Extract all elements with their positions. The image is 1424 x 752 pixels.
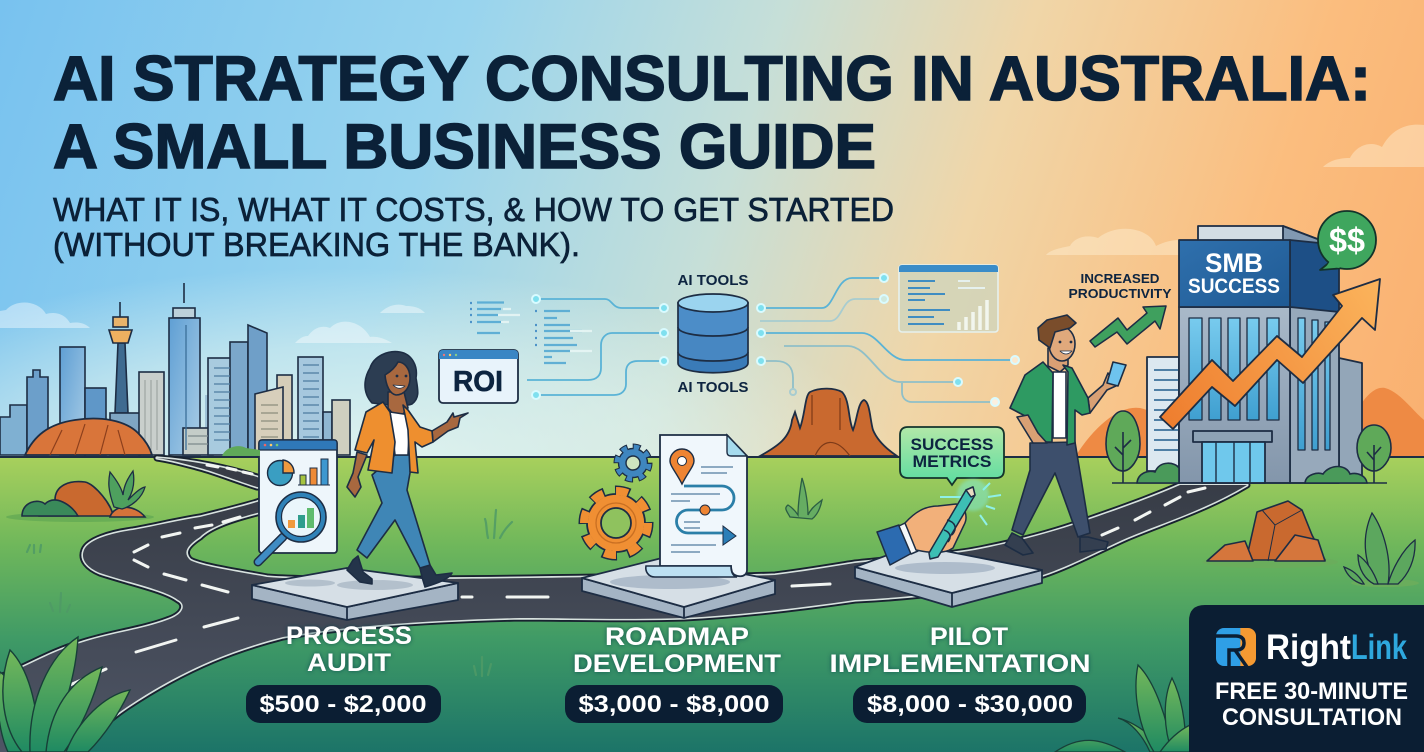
- subtitle: WHAT IT IS, WHAT IT COSTS, & HOW TO GET STARTED: [53, 191, 894, 228]
- woman walking: [347, 352, 468, 587]
- pants: [357, 455, 430, 568]
- report with magnifier: [258, 440, 337, 562]
- dark grass tuft centre: [786, 478, 822, 519]
- shirt left panel: [1010, 362, 1053, 442]
- neck: [1048, 348, 1068, 372]
- call to action panel: FREE 30-MINUTE: [1215, 678, 1408, 705]
- network lines: [527, 278, 1015, 402]
- label: process audit: PROCESS: [286, 622, 412, 650]
- code lists: [470, 302, 592, 363]
- title: A SMALL BUSINESS GUIDE: [53, 112, 876, 182]
- pie chart: [268, 460, 294, 486]
- call to action panel: Link: [1351, 628, 1407, 667]
- orange gear: [584, 491, 648, 555]
- hand holding pen: [877, 479, 1001, 565]
- city skyline: [0, 283, 350, 455]
- neck: [388, 392, 408, 420]
- winding road: [0, 458, 1247, 752]
- grass right: [1344, 513, 1419, 587]
- white top: [390, 412, 410, 455]
- shoes: [347, 556, 372, 584]
- network nodes: [532, 274, 1019, 406]
- rock right: [1202, 501, 1338, 568]
- rock and bush left: [6, 471, 154, 522]
- sign text: SMB: [1205, 248, 1263, 278]
- subtitle: (WITHOUT BREAKING THE BANK).: [53, 226, 580, 263]
- large grass bottom-left: [0, 637, 130, 752]
- gear icons: [584, 447, 649, 555]
- platform: process audit: [252, 568, 458, 620]
- label: pilot implementation: PILOT: [930, 623, 1008, 651]
- man walking with phone: [1005, 315, 1126, 555]
- platform: roadmap development: [582, 558, 775, 618]
- label: roadmap development: ROADMAP: [605, 623, 749, 651]
- phone arm: [1088, 373, 1118, 413]
- hair: [1038, 315, 1076, 348]
- face: [1049, 327, 1075, 361]
- increased productivity label: PRODUCTIVITY: [1068, 286, 1172, 301]
- jacket left panel and sleeve: [355, 402, 395, 473]
- trees and bushes: [222, 411, 1391, 483]
- label: process audit: $500 - $2,000: [260, 691, 426, 718]
- roadmap document: [646, 435, 747, 577]
- label: pilot implementation: [830, 623, 1090, 723]
- mesa rock: [760, 389, 897, 456]
- label: pilot implementation: $8,000 - $30,000: [867, 691, 1073, 718]
- white tee: [1053, 372, 1066, 438]
- Uluru rock: [25, 419, 152, 455]
- large grass bottom-right: [1055, 665, 1190, 752]
- label: pilot implementation: IMPLEMENTATION: [830, 650, 1090, 678]
- orange growth arrow: [1160, 279, 1380, 429]
- AI tools database: [678, 272, 748, 396]
- blue gear: [617, 447, 649, 479]
- face: [385, 362, 410, 395]
- sky background: [0, 0, 1424, 460]
- sign text: SUCCESS: [1188, 275, 1280, 298]
- increased productivity label: INCREASED: [1080, 271, 1160, 286]
- success metrics callout: METRICS: [912, 452, 992, 471]
- call to action panel: Right: [1266, 628, 1351, 667]
- title: AI STRATEGY CONSULTING IN AUSTRALIA:: [53, 44, 1371, 114]
- AI tools database: AI TOOLS: [678, 379, 748, 396]
- map pin: [670, 449, 694, 484]
- increased productivity label: [1068, 271, 1172, 301]
- shoes: [1005, 533, 1033, 555]
- left forearm: [1017, 415, 1047, 443]
- translucent dashboard panel: [899, 265, 998, 332]
- ROI window: [439, 350, 518, 403]
- hair: [365, 352, 418, 406]
- success metrics callout: [900, 427, 1004, 485]
- label: roadmap development: [565, 623, 783, 723]
- left arm: [347, 452, 367, 497]
- success metrics callout: SUCCESS: [910, 435, 994, 454]
- jacket right panel and sleeve: [403, 405, 433, 473]
- phone: [1107, 362, 1126, 386]
- sign text: [1188, 248, 1280, 298]
- road lane dashes: [70, 465, 1205, 685]
- dollar speech bubble: [1318, 211, 1376, 270]
- building window stripes: [145, 325, 319, 450]
- platform: pilot implementation: [855, 545, 1042, 607]
- dollar speech bubble: $$: [1329, 222, 1365, 260]
- ROI window: ROI: [453, 366, 503, 398]
- ground: [0, 457, 1424, 752]
- RightLink logo mark: [1216, 628, 1256, 667]
- label: process audit: [246, 622, 441, 723]
- pointing arm: [432, 413, 468, 442]
- bar chart: [298, 459, 330, 485]
- label: roadmap development: DEVELOPMENT: [573, 650, 781, 678]
- label: roadmap development: $3,000 - $8,000: [578, 691, 770, 718]
- grass tufts: [27, 510, 512, 676]
- SMB office building: [1147, 226, 1362, 483]
- title: [53, 44, 1371, 182]
- magnifier: [258, 492, 326, 562]
- label: process audit: AUDIT: [307, 649, 391, 677]
- AI tools database: AI TOOLS: [678, 272, 748, 289]
- route line: [676, 486, 734, 533]
- green trend arrow: [1090, 306, 1166, 347]
- orange hills right: [1075, 388, 1424, 457]
- call to action panel: CONSULTATION: [1222, 704, 1402, 731]
- pants: [1012, 442, 1090, 537]
- call to action panel: [1189, 605, 1424, 752]
- subtitle: [53, 191, 894, 263]
- clouds: [0, 125, 1424, 343]
- shirt right panel and sleeve: [1063, 365, 1090, 445]
